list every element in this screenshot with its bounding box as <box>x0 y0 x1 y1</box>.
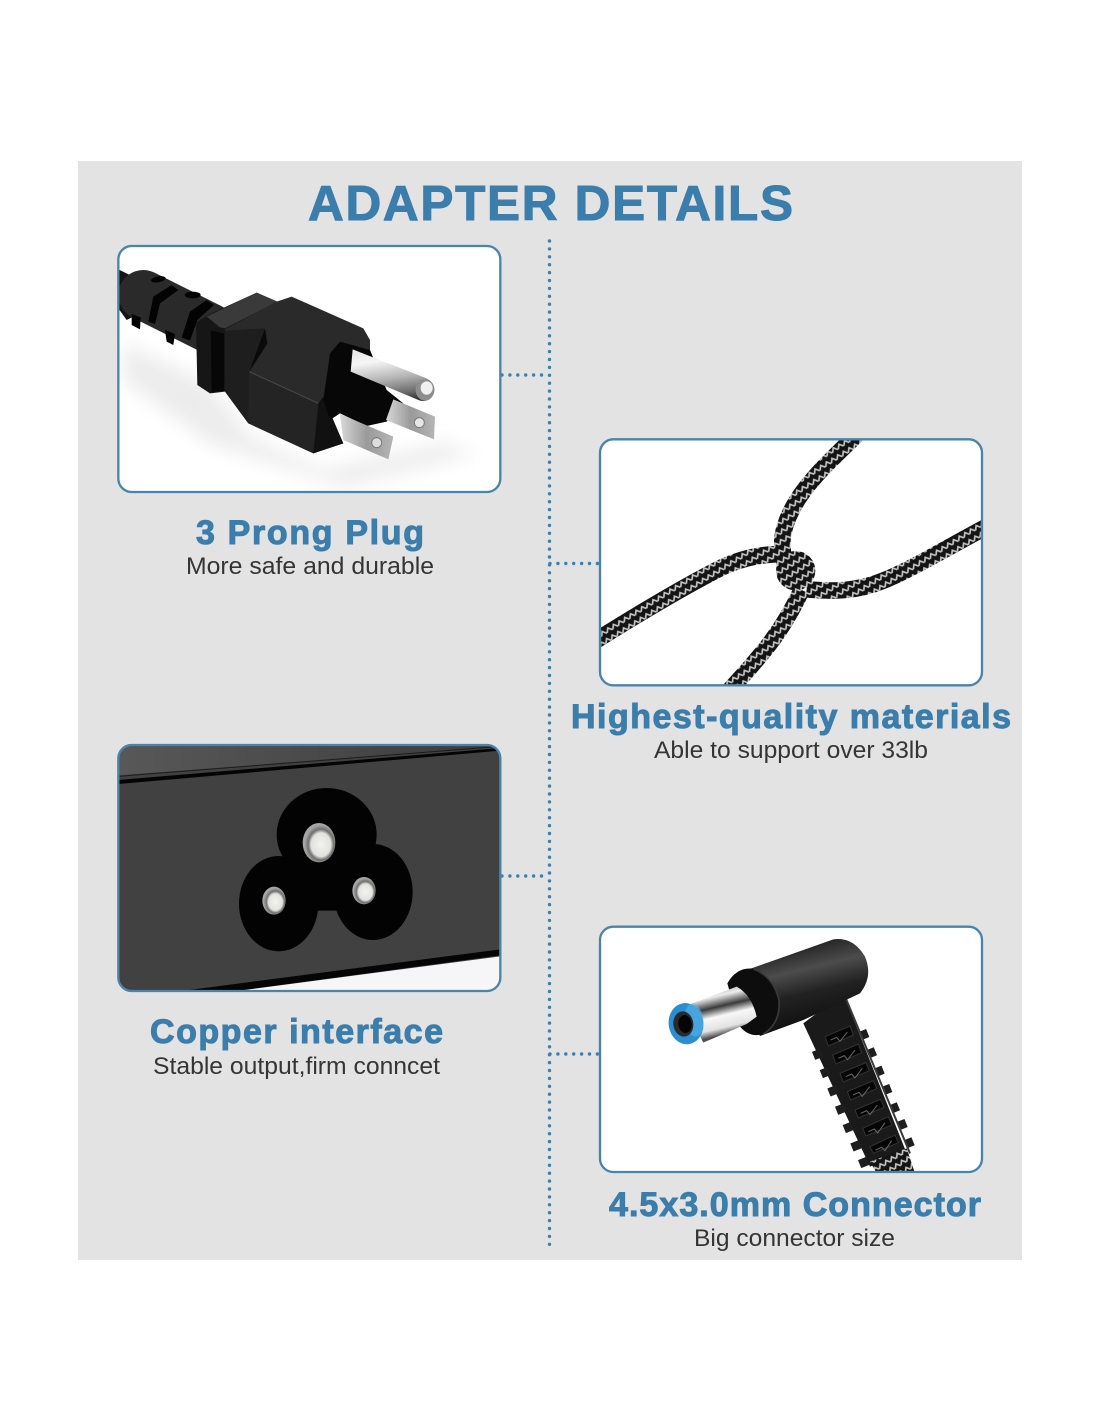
text: Able to support over 33lb: Able to support over 33lb <box>654 737 928 764</box>
panel: copper interface socket <box>118 745 500 991</box>
plug body <box>225 297 370 453</box>
cord and strain relief <box>118 269 214 345</box>
heading: 4.5x3.0mm Connector: 4.5x3.0mm Connector <box>609 1186 981 1224</box>
lower flat blade <box>340 414 393 459</box>
cable with teeth <box>803 993 915 1173</box>
text: More safe and durable: More safe and durable <box>186 553 434 580</box>
dark face under pins <box>323 342 403 426</box>
blue tip <box>668 1003 704 1044</box>
socket pins <box>303 823 335 862</box>
page background panel <box>78 161 1022 1260</box>
text: Big connector size: Big connector size <box>694 1225 895 1252</box>
metal pin <box>685 987 757 1043</box>
heading: 3 Prong Plug: 3 Prong Plug <box>196 514 424 552</box>
barrel <box>747 939 868 1036</box>
title: ADAPTER DETAILS <box>308 176 793 231</box>
heading: Copper interface: Copper interface <box>150 1013 443 1051</box>
panel: braided cable <box>597 435 987 692</box>
ground pin <box>351 349 434 401</box>
soft shadow <box>123 343 477 487</box>
upper flat blade <box>386 399 435 439</box>
three-lobed socket <box>239 788 413 951</box>
dotted connector lines <box>502 241 600 1245</box>
collar <box>196 293 277 393</box>
panel: 3 prong plug <box>118 246 500 492</box>
panel: 4.5x3.0mm connector <box>600 927 982 1173</box>
heading: Highest-quality materials: Highest-quality materials <box>571 698 1011 736</box>
text: Stable output,firm conncet: Stable output,firm conncet <box>153 1053 440 1080</box>
